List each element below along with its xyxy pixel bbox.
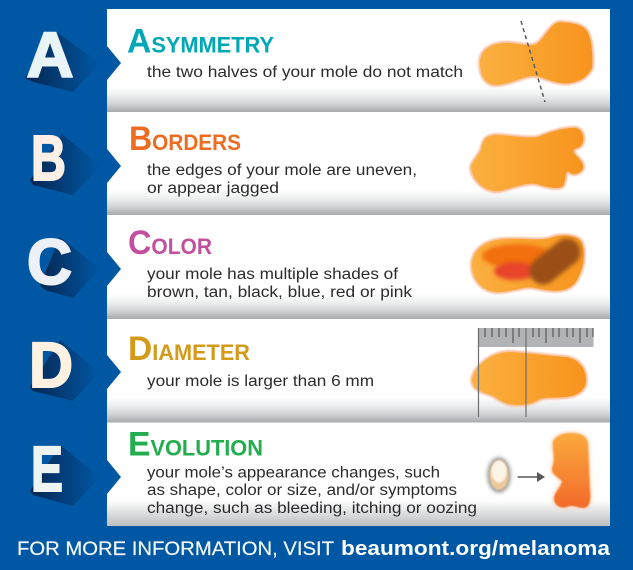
panel: borders [30,112,610,215]
footer call to action [17,537,611,560]
letter A with shadow: A [26,19,74,91]
dashed axis line [521,21,545,102]
letter E with shadow: E [31,433,63,505]
description: evolution: your mole’s appearance changes, such [147,464,440,482]
description: diameter: your mole is larger than 6 mm [147,373,374,390]
letter B with shadow [30,122,100,195]
panel: evolution: as shape, color or size, and/or symptoms [147,482,457,499]
panel: color: brown, tan, black, blue, red or pink [147,284,412,301]
panel: asymmetry [25,9,610,112]
letter D with shadow [29,329,100,401]
letter C with shadow [27,226,100,298]
footer call to action: FOR MORE INFORMATION, VISIT [17,539,334,560]
panel: evolution: change, such as bleeding, itching or oozing [147,500,477,517]
mole: evolved [552,433,590,508]
mole: large diameter [472,352,586,405]
heading: color: COLOR [128,224,212,262]
letter B with shadow: B [31,122,66,194]
description: asymmetry: the two halves of your mole do not match [147,64,463,81]
panel: borders: or appear jagged [147,180,279,197]
letter E with shadow [30,433,100,506]
arrow [518,472,545,482]
ruler [478,328,594,347]
mole: multiple colors [472,235,584,292]
letter A with shadow [25,19,100,92]
panel: diameter [29,319,610,422]
panel: evolution [30,422,610,526]
heading: diameter: DIAMETER [128,330,250,368]
description: color: your mole has multiple shades of [147,266,399,283]
letter C with shadow: C [27,226,72,298]
description: borders: the edges of your mole are uneven, [147,162,417,179]
mole: asymmetric [480,22,592,85]
measure lines [478,328,526,417]
heading: borders: BORDERS [129,120,241,158]
letter D with shadow: D [29,329,73,401]
panel: color [27,215,610,319]
footer call to action: beaumont.org/melanoma [341,537,611,560]
mole: uneven borders [471,128,583,191]
heading: evolution: EVOLUTION [128,426,263,464]
heading: asymmetry: ASYMMETRY [127,22,274,60]
mole: small early [488,458,510,492]
